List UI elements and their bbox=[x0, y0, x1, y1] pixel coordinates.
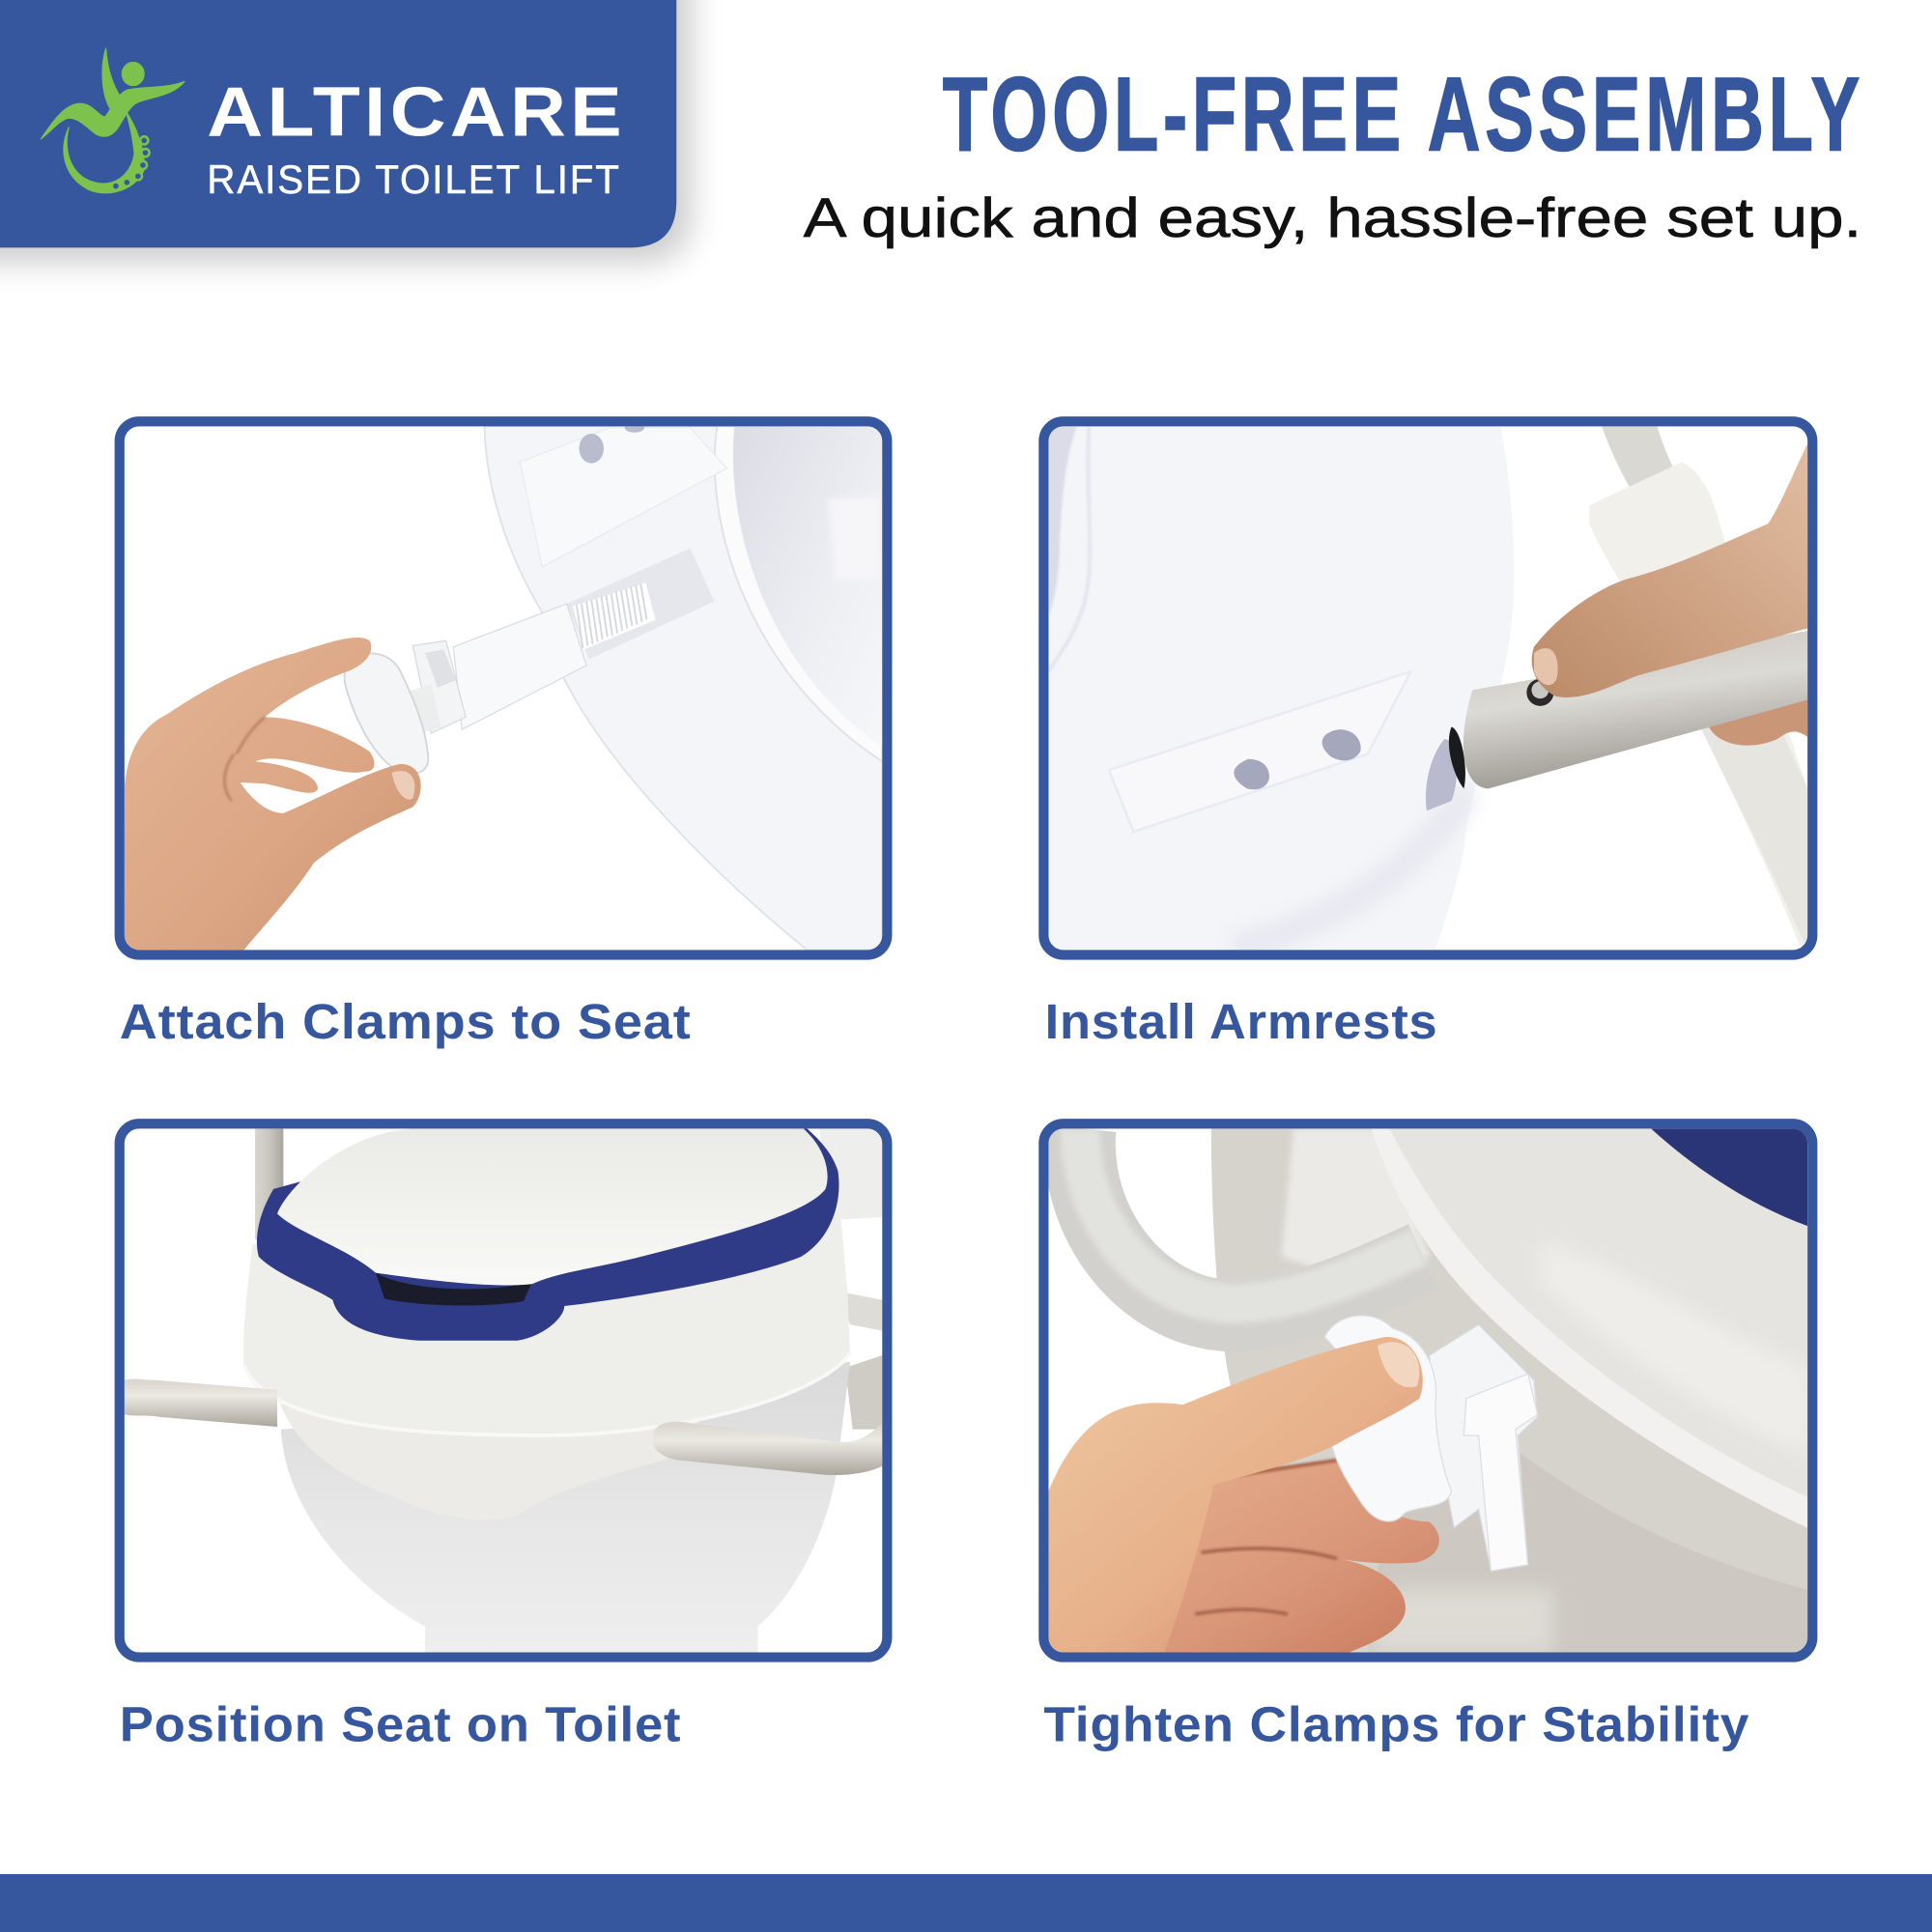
armrest back bbox=[1589, 426, 1807, 950]
clamp slot bbox=[567, 549, 715, 659]
armrest tube bbox=[1449, 631, 1807, 788]
seat bbox=[1048, 426, 1514, 950]
navy rim bbox=[1651, 1128, 1807, 1226]
brand header bbox=[0, 0, 692, 263]
clamp teeth bbox=[573, 582, 656, 649]
armrest post and back pad bbox=[255, 1128, 882, 1430]
subtitle: A quick and easy, hassle-free set up. bbox=[804, 187, 1861, 249]
caption: install armrests: Install Armrests bbox=[1045, 994, 1438, 1049]
panel: install armrests bbox=[1043, 421, 1812, 955]
bowl lower bbox=[1368, 1343, 1807, 1652]
brand name: ALTICARE bbox=[207, 72, 626, 151]
seat lid bbox=[277, 1128, 828, 1285]
caption: position seat: Position Seat on Toilet bbox=[120, 1696, 681, 1751]
navy rim bbox=[257, 1128, 839, 1341]
seat bbox=[484, 423, 882, 950]
product name: RAISED TOILET LIFT bbox=[207, 156, 621, 202]
seat riser bbox=[242, 1219, 852, 1484]
caption: attach clamps: Attach Clamps to Seat bbox=[120, 994, 692, 1049]
hand and thumb bbox=[1048, 1337, 1423, 1652]
finger behind tube bbox=[1709, 699, 1807, 746]
panel: attach clamps to seat bbox=[120, 421, 887, 955]
panel: position seat on toilet bbox=[120, 1123, 887, 1658]
knob bbox=[1324, 1316, 1452, 1521]
armrest tube bbox=[1080, 1128, 1423, 1316]
hand bbox=[125, 638, 421, 950]
icon: Alticare logo bbox=[41, 48, 185, 193]
seat body bbox=[1372, 1128, 1807, 1528]
hand bbox=[1532, 443, 1807, 697]
toilet background bbox=[1164, 1128, 1807, 1652]
armrest right bbox=[653, 1422, 882, 1475]
toilet bowl bbox=[281, 1361, 850, 1652]
caption: tighten clamps: Tighten Clamps for Stability bbox=[1043, 1696, 1749, 1751]
panel: tighten clamps bbox=[1043, 1123, 1812, 1658]
fingers bbox=[1109, 1460, 1439, 1652]
armrest left bbox=[125, 1378, 277, 1427]
dark opening bbox=[376, 1273, 532, 1306]
clamp and knob bbox=[345, 604, 586, 774]
clamp bbox=[1430, 1324, 1538, 1571]
footer bar bbox=[0, 1874, 1932, 1932]
